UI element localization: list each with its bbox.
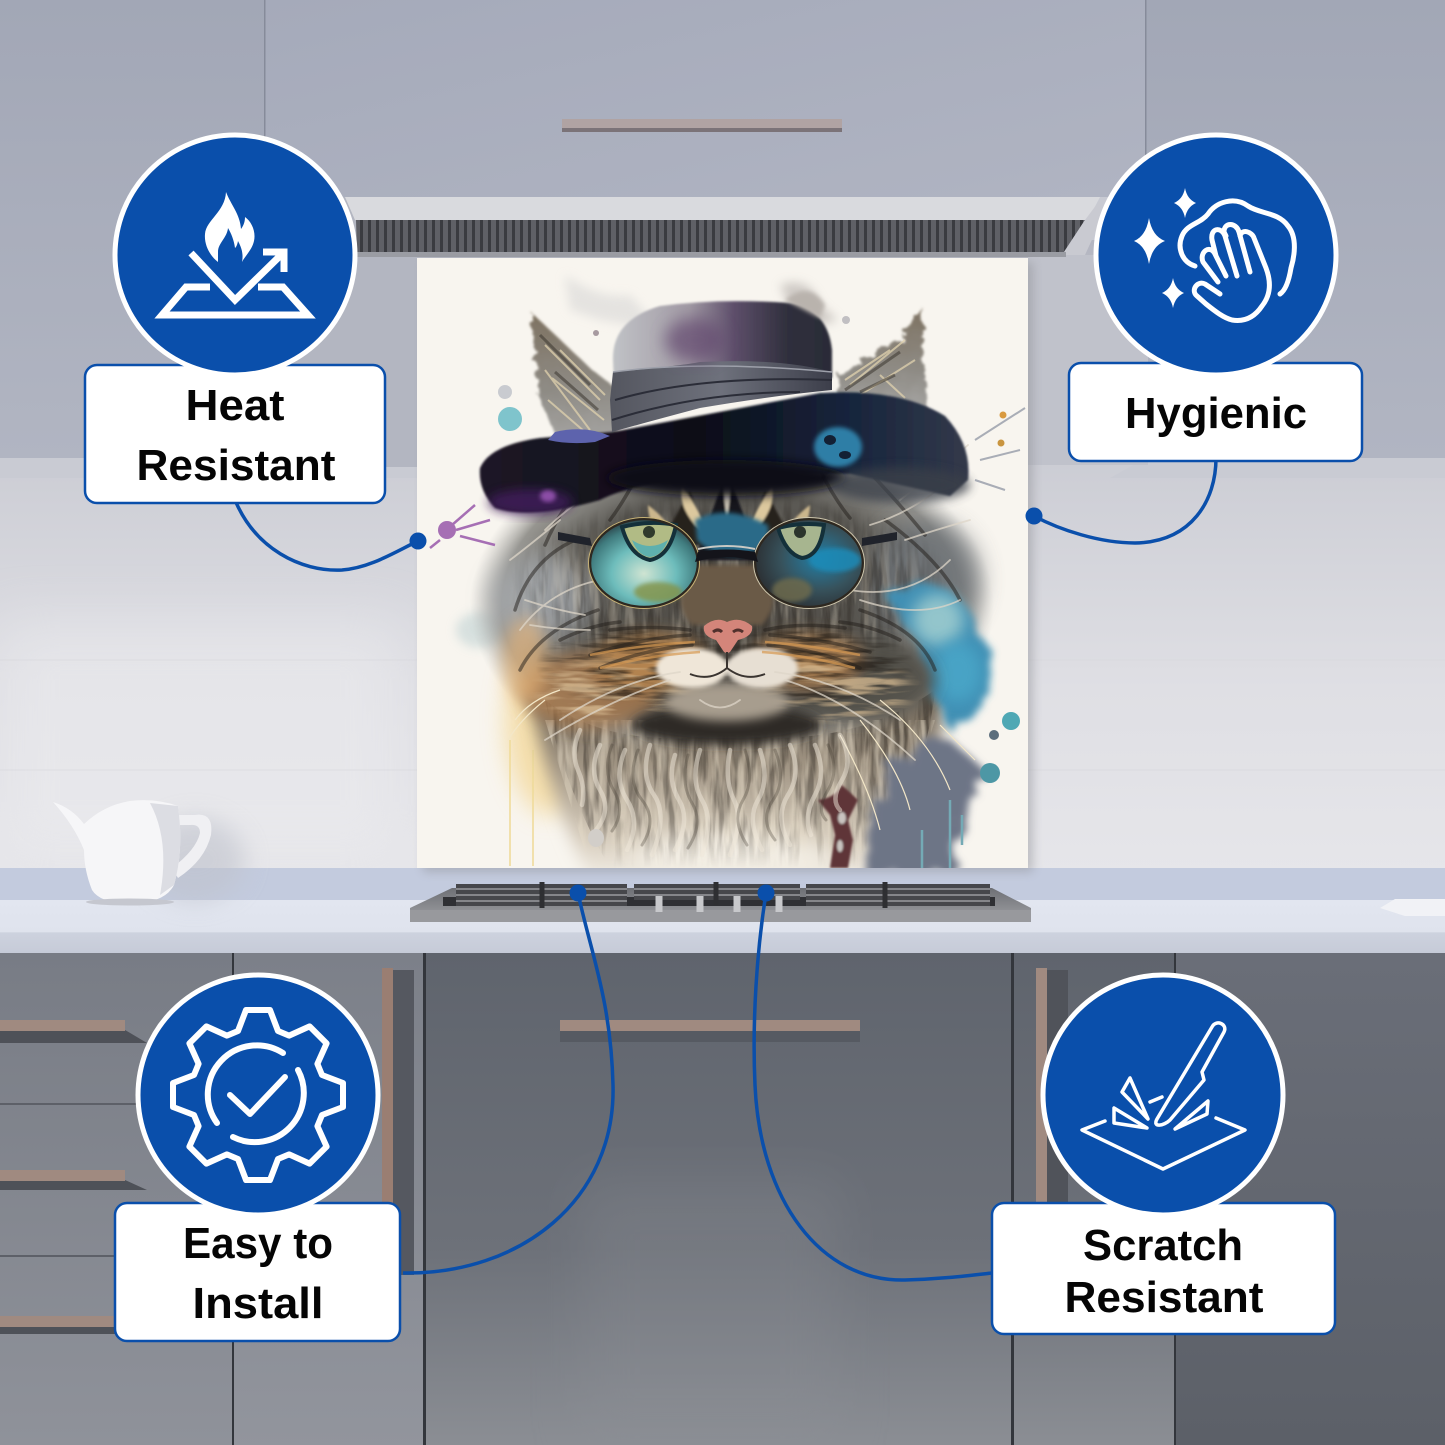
chest fur (530, 680, 945, 880)
connector: Scratch Resistant (754, 884, 992, 1280)
wall (0, 240, 1445, 880)
icon badge (138, 975, 378, 1215)
dark chin shadow (632, 705, 822, 745)
label box (85, 365, 385, 503)
upper cabinets (0, 0, 264, 458)
icon: gear with check mark (173, 1010, 343, 1180)
hat crown (612, 300, 834, 380)
lower cabinet handles (0, 1103, 232, 1105)
feature: Scratch Resistant (992, 975, 1335, 1334)
feature: Heat Resistant (85, 135, 385, 503)
white muzzle (656, 648, 798, 688)
cat artwork panel (417, 258, 1033, 886)
ears (531, 307, 925, 445)
icon badge (115, 135, 355, 375)
hat paint marks (814, 427, 862, 467)
feature: Hygienic (1069, 135, 1362, 461)
label text: Heat (186, 381, 285, 430)
hat (480, 291, 970, 515)
upper cabinet handle (562, 119, 842, 130)
feature: Easy to Install (115, 975, 400, 1341)
blue-grey wash lower right (868, 735, 985, 875)
connector: Heat Resistant (235, 500, 426, 570)
chest wavy fur (574, 730, 848, 855)
label text: Easy to (183, 1219, 333, 1268)
label box (115, 1203, 400, 1341)
faint grey wash behind the hat (456, 275, 838, 648)
fur strokes: dark (515, 470, 960, 670)
extractor hood (345, 197, 1100, 220)
backsplash ledge (0, 868, 1445, 902)
nose (690, 620, 765, 677)
icon badge (1096, 135, 1336, 375)
eye right (778, 524, 824, 558)
forehead stripes (646, 488, 812, 562)
chest texture (545, 690, 935, 868)
paint splatters (430, 316, 1025, 847)
yellow watercolour wash (492, 670, 565, 826)
icon: flame with deflected arrow (162, 192, 308, 315)
countertop (0, 900, 1445, 953)
cooktop (410, 882, 1031, 922)
lower cabinets (0, 953, 232, 1445)
dark red drips (818, 785, 858, 868)
icon badge (1043, 975, 1283, 1215)
cheek texture (538, 626, 726, 704)
feature: Scratch Resistant: Resistant (1064, 1273, 1264, 1322)
hat brim (480, 392, 969, 512)
fur base (474, 473, 990, 748)
label text: Hygienic (1125, 389, 1307, 438)
label text: Scratch (1083, 1221, 1243, 1270)
icon: hand wiping with sparkles (1134, 188, 1294, 320)
label box (1069, 363, 1362, 461)
label box (992, 1203, 1335, 1334)
eye left (622, 523, 676, 560)
fur strokes: light (510, 445, 970, 760)
teal wash right side (885, 585, 991, 730)
connector: Easy to Install (403, 884, 613, 1273)
connector: Hygienic (1026, 458, 1216, 543)
nose bridge (681, 565, 773, 625)
glasses (558, 518, 897, 608)
feature: Heat Resistant: Resistant (136, 441, 336, 490)
feature: Easy to Install: Install (192, 1279, 324, 1328)
cheek and muzzle colours (520, 634, 935, 728)
icon: knife on surface (1082, 1023, 1245, 1169)
hat band (610, 361, 832, 432)
face texture (518, 504, 938, 654)
teapot (53, 800, 245, 906)
